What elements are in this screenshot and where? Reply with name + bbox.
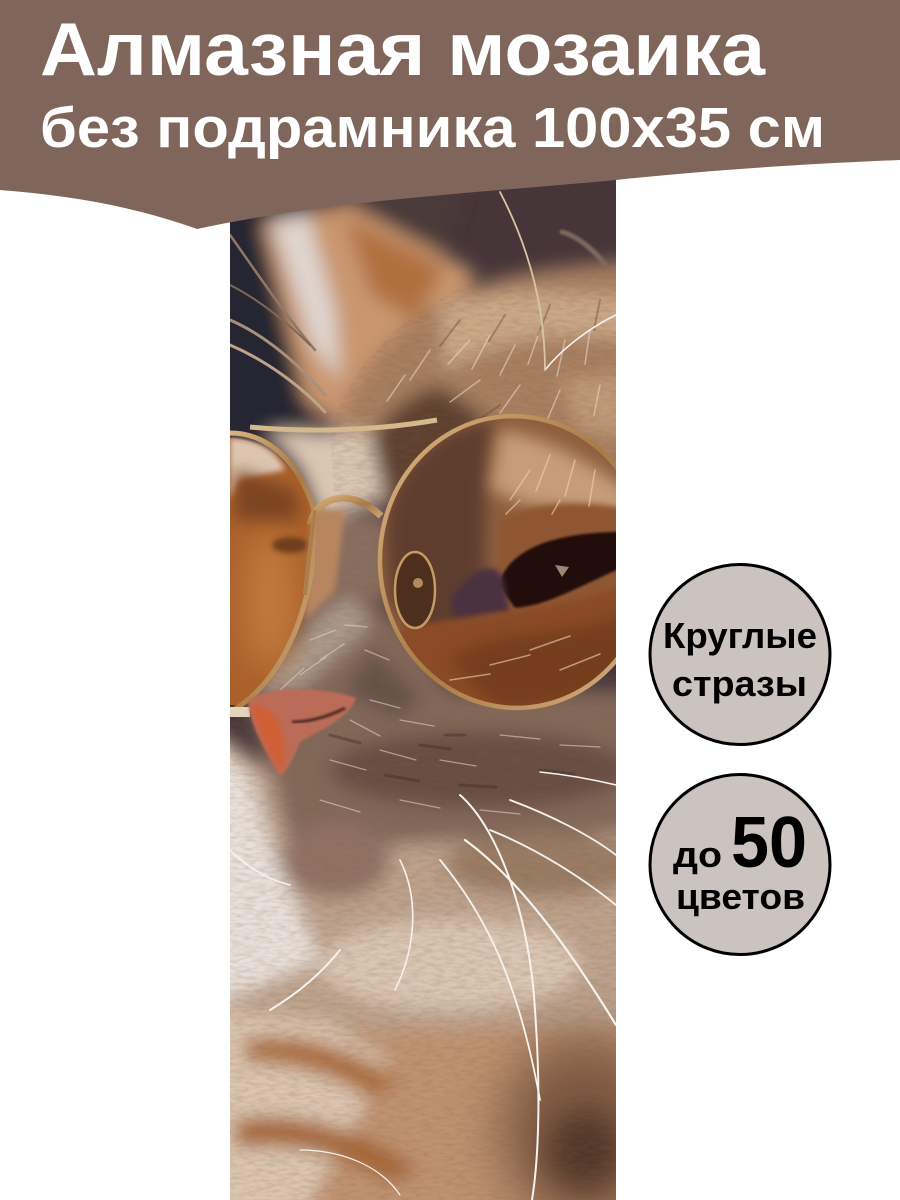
glasses — [230, 414, 616, 717]
badge: round rhinestones: стразы — [672, 663, 807, 704]
photo: cat wearing round glasses — [230, 180, 616, 1200]
badge: up to 50 colours — [650, 774, 830, 954]
left lens rim — [228, 433, 314, 712]
fine fur texture — [230, 260, 616, 1200]
badge: up to 50 colours: цветов — [676, 876, 805, 917]
painted cat base layers — [230, 202, 616, 1200]
eye — [500, 530, 616, 610]
right lens view — [382, 418, 616, 706]
right lens rim — [378, 414, 616, 710]
title: Алмазная мозаика — [40, 7, 766, 91]
photo background — [230, 180, 616, 842]
reflected fur strokes — [450, 455, 600, 680]
lens reflection — [395, 552, 435, 628]
bridge — [310, 498, 381, 525]
lower left rim band — [228, 707, 250, 717]
badge: round rhinestones: Круглые — [663, 615, 817, 656]
dark backdrop left — [230, 208, 326, 448]
left lens — [230, 438, 345, 705]
badge: round rhinestones — [650, 564, 830, 744]
chest fur — [297, 1026, 616, 1200]
subtitle: без подрамника 100х35 см — [40, 96, 825, 160]
nose — [248, 689, 356, 776]
header banner — [0, 0, 900, 229]
hand drawn fur strokes — [280, 300, 600, 814]
forehead fur — [336, 250, 616, 463]
nose bridge blur area — [268, 432, 385, 520]
badge: up to 50 colours: до — [673, 834, 722, 875]
temple arm — [250, 420, 437, 430]
backdrop brown middle — [333, 202, 450, 258]
muzzle and cheek — [242, 593, 616, 855]
whiskers — [230, 192, 616, 1200]
lower face — [230, 726, 616, 1043]
ear — [262, 205, 475, 430]
chest shadow right — [500, 1035, 670, 1200]
badge: up to 50 colours: 50 — [731, 803, 807, 883]
